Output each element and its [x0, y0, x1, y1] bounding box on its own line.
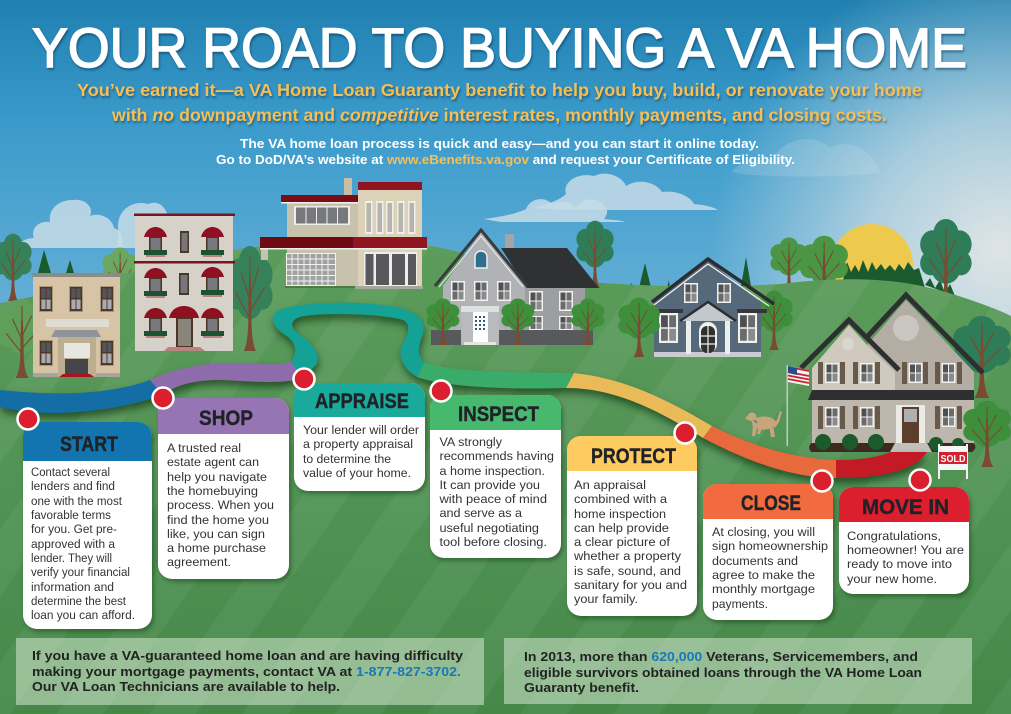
panel: protect: is safe, sound, and: [574, 564, 681, 578]
road segment: inspect (green): [417, 362, 574, 389]
panel: move in: homeowner! You are: [847, 543, 964, 557]
callout: mortgage difficulty: making your mortgage payments, contact VA at 1-877-827-3702.: [32, 665, 461, 679]
panel: close: agree to make the: [712, 568, 815, 582]
winding road: [0, 303, 927, 478]
panel: protect: combined with a: [574, 492, 667, 506]
intro text: Go to DoD/VA’s website at www.eBenefits.va.gov and request your Certificate of Eligibility.: [216, 152, 795, 167]
panel: appraise: value of your home.: [303, 466, 411, 480]
panel: shop: estate agent can: [167, 455, 259, 469]
panel: start: information and: [31, 580, 114, 594]
panel: protect: your family.: [574, 592, 638, 606]
building: blue siding house: [618, 259, 774, 357]
panel: close: At closing, you will: [712, 525, 815, 539]
building: gray house with black roof: [426, 230, 604, 345]
panel: inspect: with peace of mind: [438, 492, 547, 506]
intro text: The VA home loan process is quick and easy—and you can start it online today.: [240, 136, 759, 151]
panel: close: CLOSE: [741, 492, 801, 515]
panel: protect: home inspection: [574, 507, 666, 521]
panel: start: for you. Get pre-: [31, 522, 117, 536]
panel: close: payments.: [712, 597, 768, 611]
panel: inspect: and serve as a: [440, 506, 522, 520]
panel: shop: process. When you: [167, 498, 274, 512]
panel: protect: sanitary for you and: [574, 578, 687, 592]
road segment: shop (purple): [150, 361, 303, 395]
title: YOUR ROAD TO BUYING A VA HOME: [32, 16, 967, 79]
road segment: protect (yellow): [566, 373, 712, 438]
callout: mortgage difficulty: If you have a VA-guaranteed home loan and are having difficulty: [32, 649, 463, 663]
panel: move in: [839, 487, 969, 594]
panel: close: [703, 484, 833, 620]
sold sign: SOLD: [940, 453, 966, 465]
panel: start: lenders and find: [31, 479, 115, 493]
panel: shop: like, you can sign: [167, 527, 265, 541]
panel: move in: MOVE IN: [862, 496, 949, 519]
panel: inspect: [430, 395, 561, 558]
callout: 2013 statistic: In 2013, more than 620,000 Veterans, Servicemembers, and: [524, 650, 918, 664]
panel: close: sign homeownership: [712, 539, 828, 553]
panel: shop: the homebuying: [167, 484, 258, 498]
callout: mortgage difficulty: [16, 638, 484, 705]
panel: inspect: VA strongly: [440, 435, 503, 449]
panel: start: loan you can afford.: [31, 608, 135, 622]
callout: 2013 statistic: [504, 638, 972, 704]
panel: protect: PROTECT: [591, 445, 676, 468]
sky background: [0, 0, 1011, 400]
panel: appraise: a property appraisal: [303, 437, 413, 451]
panel: protect: whether a property: [573, 549, 682, 563]
building: white apartment with red awnings: [134, 214, 235, 351]
panel: appraise: [294, 383, 425, 491]
subtitle: You’ve earned it—a VA Home Loan Guaranty benefit to help you buy, build, or renovate your home: [77, 80, 922, 100]
building: tan office: [32, 273, 121, 377]
panel: inspect: It can provide you: [440, 478, 540, 492]
panel: inspect: useful negotiating: [440, 521, 539, 535]
panel: start: START: [60, 433, 118, 456]
panel: shop: agreement.: [167, 555, 231, 569]
background trees behind the hill line: [0, 219, 972, 312]
pine trees on the horizon: [38, 250, 955, 340]
panel: appraise: APPRAISE: [315, 390, 409, 413]
panel: inspect: a home inspection.: [440, 464, 545, 478]
panel: shop: A trusted real: [167, 441, 241, 455]
panel: start: Contact several: [31, 465, 110, 479]
panel: move in: Congratulations,: [847, 529, 941, 543]
panel: inspect: INSPECT: [458, 403, 539, 426]
clouds: [15, 139, 880, 248]
panel: move in: your new home.: [847, 572, 937, 586]
callout: 2013 statistic: Guaranty benefit.: [524, 681, 639, 695]
panel: start: verify your financial: [31, 565, 130, 579]
panel: start: lender. They will: [31, 551, 112, 565]
road segment: start (blue): [0, 380, 163, 413]
road step markers: [18, 368, 930, 492]
panel: shop: a home purchase: [167, 541, 266, 555]
intro text: [216, 136, 795, 167]
panel: protect: [567, 436, 697, 616]
callout: mortgage difficulty: Our VA Loan Technicians are available to help.: [32, 680, 340, 694]
subtitle: with no downpayment and competitive interest rates, monthly payments, and closing costs.: [111, 105, 887, 125]
road segment: appraise (teal): [273, 303, 424, 378]
panel: close: monthly mortgage: [712, 582, 815, 596]
panel: close: documents and: [712, 554, 798, 568]
grass hills: [0, 242, 1011, 714]
panel: shop: [158, 398, 289, 579]
road segment: close (orange): [703, 426, 836, 478]
panel: inspect: tool before closing.: [440, 535, 547, 549]
panel: inspect: recommends having: [440, 449, 554, 463]
panel: start: one with the most: [31, 494, 123, 508]
sold sign: [938, 444, 968, 479]
panel: start: approved with a: [31, 537, 115, 551]
panel: protect: can help provide: [574, 521, 669, 535]
panel: shop: help you navigate: [167, 470, 267, 484]
icon: american flag: [786, 365, 809, 446]
panel: appraise: to determine the: [303, 452, 391, 466]
trees on the hillside: [0, 221, 1011, 398]
panel: protect: An appraisal: [574, 478, 646, 492]
panel: protect: a clear picture of: [574, 535, 671, 549]
building: modern red-trim house: [260, 178, 427, 289]
subtitle: [77, 80, 922, 125]
panel: shop: SHOP: [199, 407, 253, 430]
panel: start: [23, 422, 152, 629]
panel: appraise: Your lender will order: [303, 423, 419, 437]
panel: start: determine the best: [31, 594, 127, 608]
panel: move in: ready to move into: [847, 557, 952, 571]
panel: shop: find the home you: [167, 513, 269, 527]
main house with sold sign: [801, 295, 1011, 479]
callout: 2013 statistic: eligible survivors obtained loans through the VA Home Loan: [524, 666, 922, 680]
panel: start: favorable terms: [31, 508, 111, 522]
road segment: move in (red): [836, 452, 927, 478]
sun: [831, 224, 913, 306]
icon: dog: [746, 411, 782, 437]
